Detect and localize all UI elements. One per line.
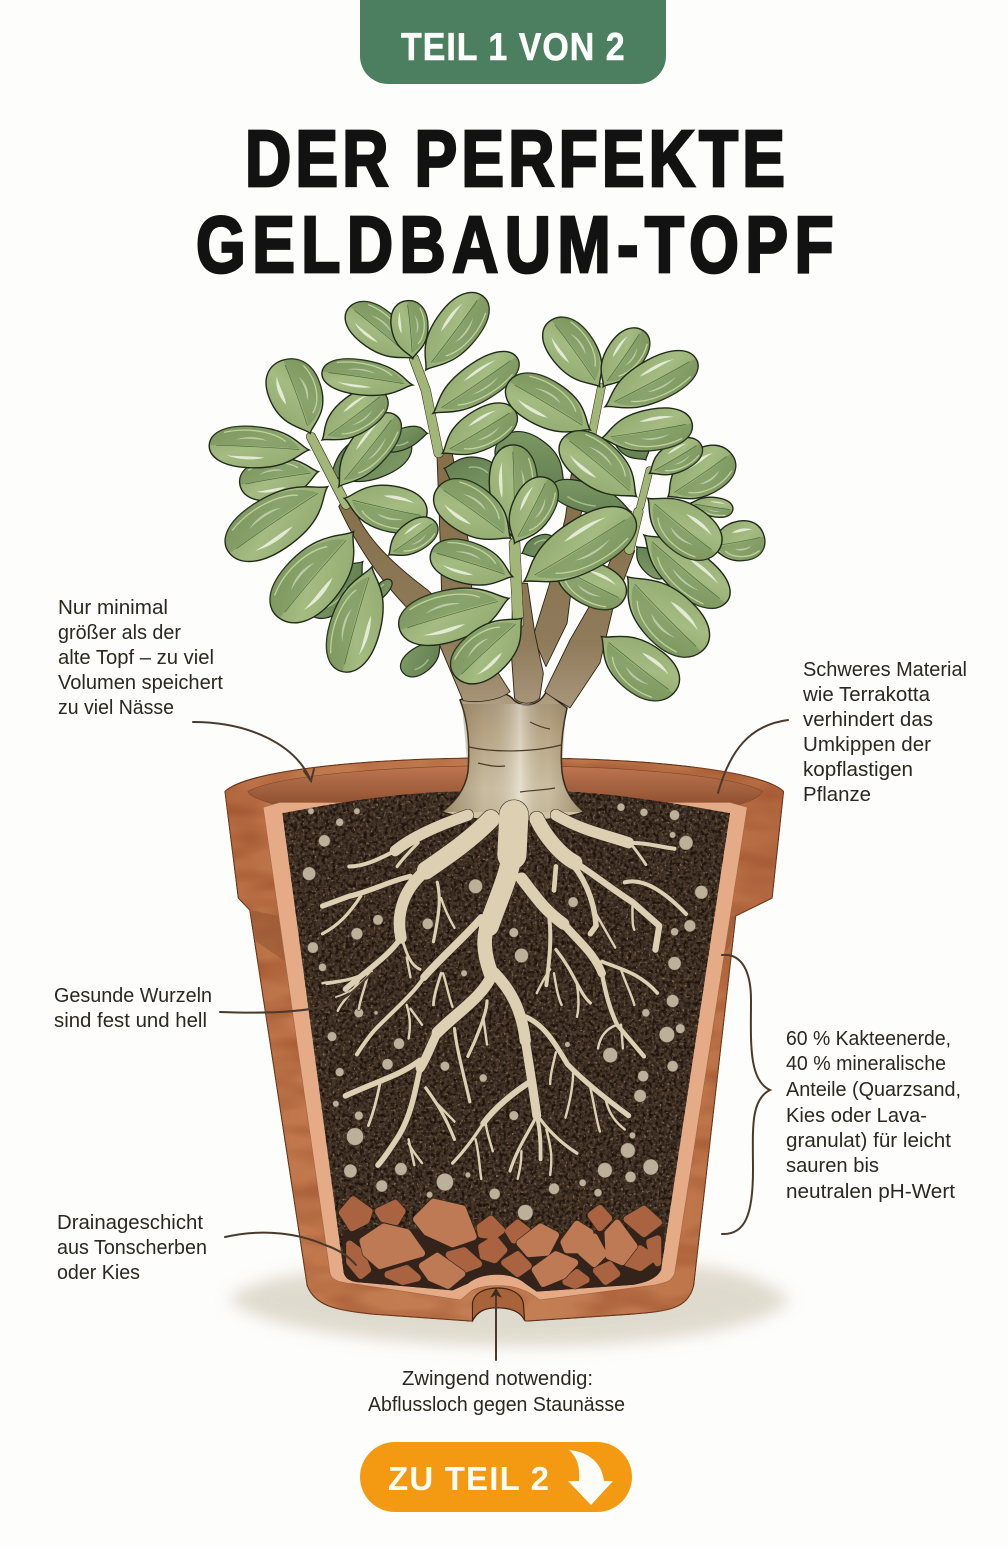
foliage (208, 284, 769, 712)
callout: drainage: Drainageschicht (57, 1212, 203, 1234)
green stems (311, 358, 650, 623)
inner back wall (248, 766, 763, 807)
callout: soil with brace: Kies oder Lava- (786, 1105, 927, 1127)
callout: drainage: oder Kies (57, 1262, 140, 1284)
drainage layer (342, 1200, 665, 1292)
callout: pot size: größer als der (58, 622, 181, 644)
callout: material: Umkippen der (803, 734, 931, 756)
roots (322, 815, 686, 1179)
callout: pot size: Nur minimal (58, 597, 168, 619)
left leaves (208, 353, 445, 677)
callout: drain hole: Zwingend notwendig: (402, 1368, 593, 1390)
title: DER PERFEKTE (245, 114, 785, 204)
pebbles (303, 803, 708, 1220)
title (196, 114, 834, 290)
pot illustration (225, 758, 784, 1321)
callout: drainage (57, 1212, 356, 1284)
callout: soil with brace: 40 % mineralische (786, 1053, 946, 1075)
tab: Teil 1 von 2: TEIL 1 VON 2 (401, 25, 625, 69)
callout: roots (54, 973, 372, 1032)
callout: soil with brace (722, 955, 961, 1234)
callout: pot size: alte Topf – zu viel (58, 647, 214, 669)
plant branches (339, 450, 635, 708)
callout: roots: Gesunde Wurzeln (54, 985, 212, 1007)
ground shadow (228, 1265, 790, 1346)
callout: soil with brace: Anteile (Quarzsand, (786, 1079, 961, 1101)
back leaves (296, 417, 675, 683)
cut face light band (263, 802, 747, 1300)
trunk (442, 691, 584, 821)
callout: soil with brace: sauren bis (786, 1155, 879, 1177)
soil (282, 791, 730, 1292)
callout: pot size (58, 597, 314, 781)
front centre leaves (391, 445, 649, 694)
callout: soil with brace: granulat) für leicht (786, 1130, 951, 1152)
tab: Teil 1 von 2 (360, 0, 666, 84)
button: Zu Teil 2 (360, 1442, 632, 1512)
pot outer body (225, 758, 784, 1321)
rim shadow left (250, 910, 285, 961)
callout: soil with brace: 60 % Kakteenerde, (786, 1028, 951, 1050)
right leaves (495, 309, 769, 712)
button: Zu Teil 2: ZU TEIL 2 (388, 1460, 549, 1497)
callout: material: kopflastigen (803, 759, 913, 781)
callout: drain hole (368, 1288, 625, 1416)
callout: drain hole: Abflussloch gegen Staunässe (368, 1394, 625, 1416)
callout: pot size: Volumen speichert (58, 672, 223, 694)
callout: drainage: aus Tonscherben (57, 1237, 207, 1259)
icon: curved down arrow (568, 1450, 613, 1505)
callout: roots: sind fest und hell (54, 1010, 207, 1032)
title: GELDBAUM-TOPF (196, 200, 834, 290)
rim shadow right (719, 916, 736, 961)
callout: material: Pflanze (803, 784, 871, 806)
top centre leaves (319, 284, 529, 469)
callout: material (718, 659, 967, 806)
callout: material: verhindert das (803, 709, 933, 731)
drain hole (472, 1288, 525, 1320)
callout: pot size: zu viel Nässe (58, 697, 174, 719)
callout: soil with brace: neutralen pH-Wert (786, 1181, 955, 1203)
callout: material: wie Terrakotta (802, 684, 931, 706)
callout: material: Schweres Material (803, 659, 967, 681)
